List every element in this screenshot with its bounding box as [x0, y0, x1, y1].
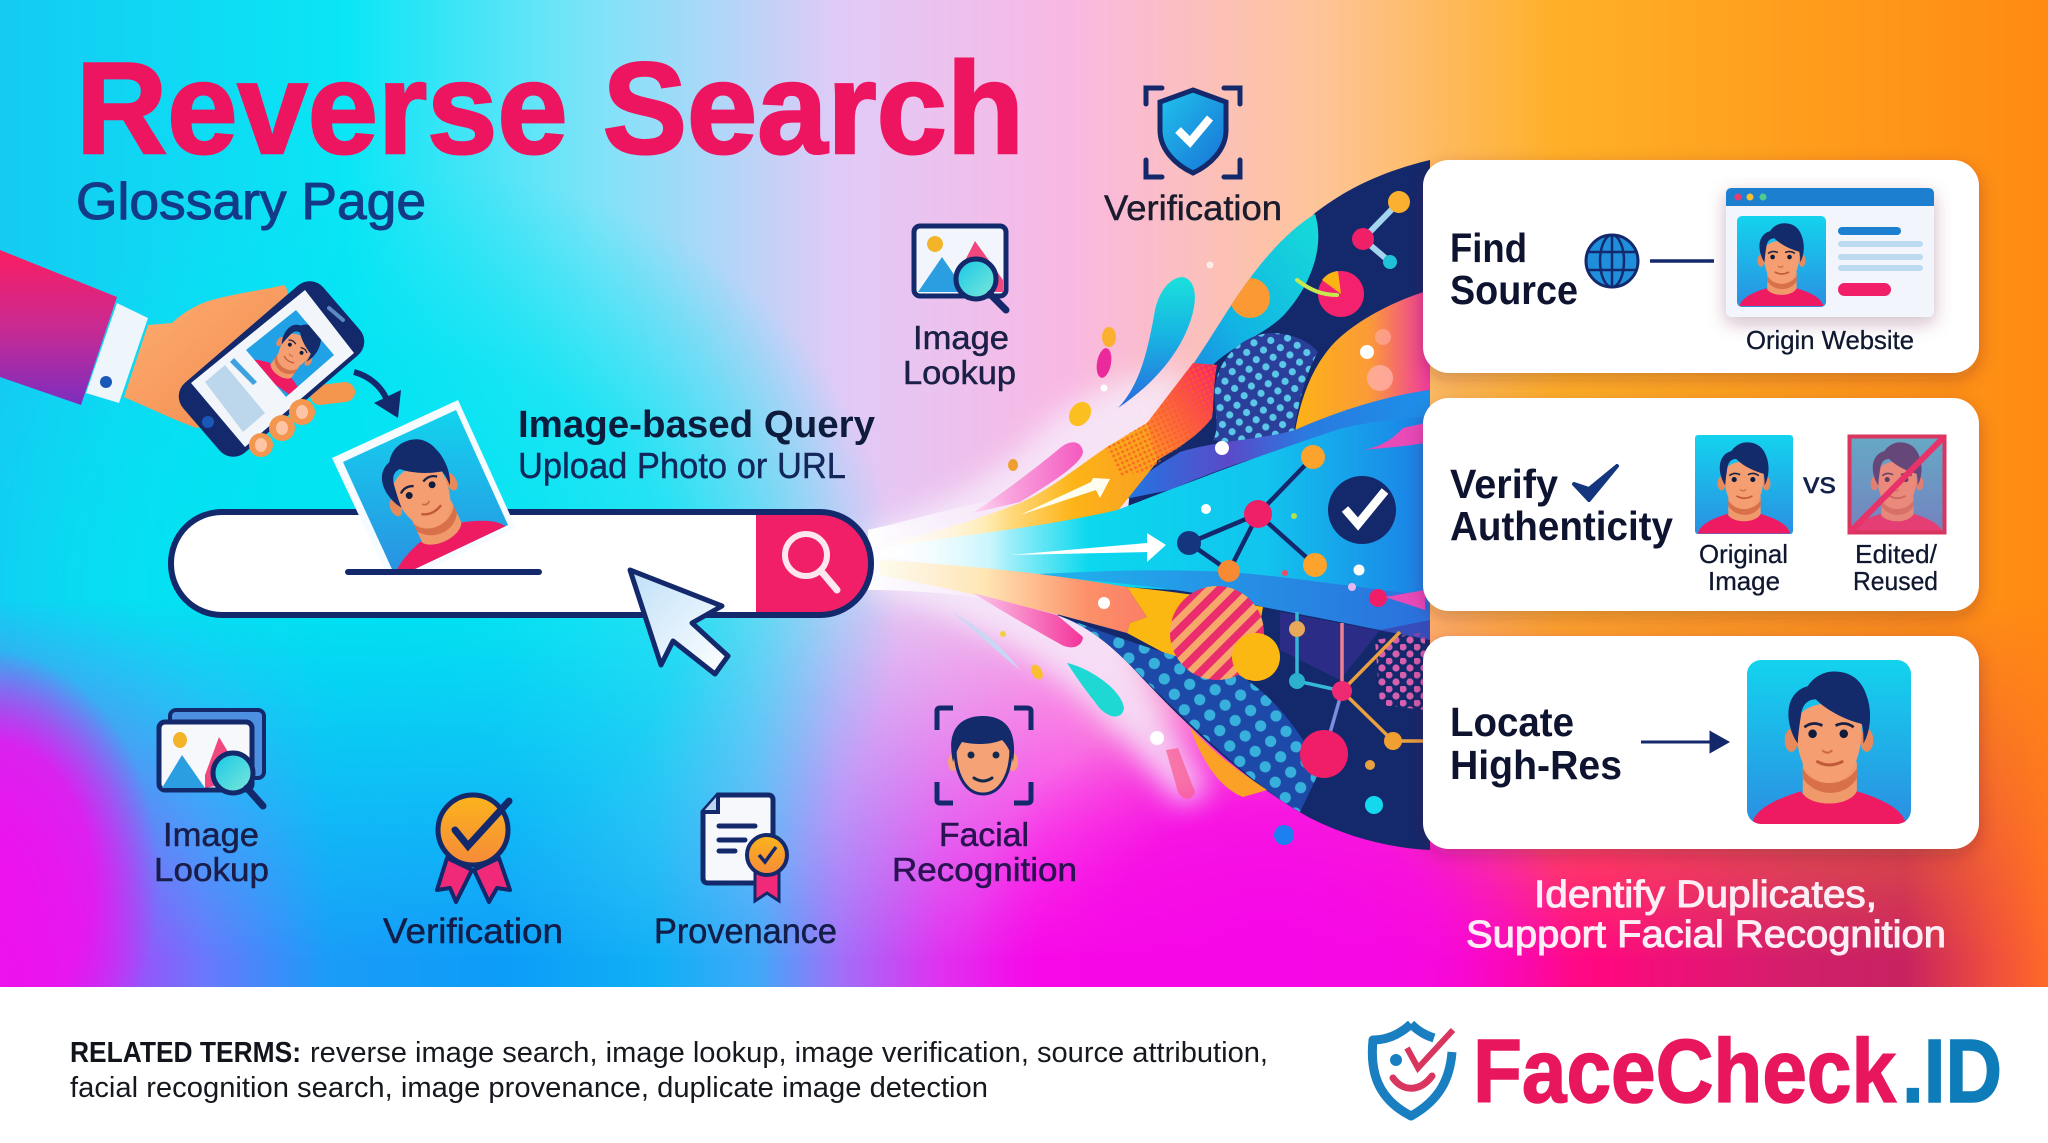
- heading: verify authenticity: Authenticity: [1450, 503, 1673, 549]
- photo card: [332, 400, 516, 586]
- labels: original and edited: [1699, 539, 1938, 596]
- browser window: [1726, 188, 1934, 317]
- pink upper blob: [973, 442, 1083, 513]
- icon: verification shield: [1146, 88, 1240, 177]
- labels: original and edited: Edited/: [1855, 539, 1938, 569]
- logo: FaceCheck: [1473, 1022, 1897, 1122]
- network two: [1177, 445, 1327, 582]
- arrow: phone to photo: [354, 372, 401, 418]
- label: facial recognition: Recognition: [892, 851, 1077, 888]
- splash artwork: [868, 160, 1430, 850]
- orange circle: [1230, 278, 1270, 318]
- teal flow: [1160, 214, 1318, 410]
- icon: facial recognition: [937, 708, 1031, 803]
- label: image lookup top: [903, 319, 1016, 391]
- network three: [1289, 612, 1425, 778]
- yellow lower flow: [1127, 587, 1263, 680]
- pink wave: [1363, 422, 1430, 450]
- related terms: facial recognition search, image provenance, duplicate image detection: [70, 1072, 988, 1104]
- heading: verify authenticity: Verify: [1450, 461, 1558, 507]
- heading: find source: Find: [1450, 225, 1527, 271]
- heading: locate high-res: High-Res: [1450, 742, 1622, 788]
- label: verification bottom: Verification: [383, 912, 563, 951]
- floating dots and drops: [953, 262, 1425, 845]
- red orange flow: [1147, 363, 1217, 462]
- search bar: [171, 512, 872, 615]
- white flare core: [868, 498, 1010, 602]
- striped circle: [1170, 586, 1264, 680]
- upload slot line: [348, 569, 539, 575]
- check badge: [1328, 476, 1396, 544]
- halftone on flow: [1105, 363, 1217, 476]
- label: provenance: Provenance: [654, 912, 837, 951]
- white arrows: [1010, 478, 1166, 562]
- fingers: [249, 433, 273, 457]
- label: origin website: Origin Website: [1746, 325, 1914, 355]
- related terms: [70, 1037, 1268, 1104]
- label: vs: vs: [1803, 467, 1836, 500]
- original image: [1695, 435, 1793, 534]
- dotted navy lower area: [1057, 615, 1320, 812]
- purple haze: [1280, 612, 1430, 680]
- cyan band: [880, 417, 1430, 610]
- hand holding phone: [0, 250, 372, 464]
- icon: globe: [1586, 235, 1638, 287]
- yellow circle: [1232, 633, 1280, 681]
- pale flare behind: [868, 370, 1210, 805]
- caption: [1466, 874, 1946, 956]
- orange sliver: [1190, 727, 1267, 797]
- label: image lookup top: Image: [913, 319, 1009, 356]
- caption: Support Facial Recognition: [1466, 914, 1946, 956]
- query label: Image-based Query: [518, 404, 875, 446]
- caption: Identify Duplicates,: [1534, 874, 1877, 916]
- label: image lookup bottom: Lookup: [154, 851, 269, 888]
- yellow flow: [893, 423, 1157, 548]
- query label: Upload Photo or URL: [518, 445, 846, 486]
- coral flow: [880, 560, 1147, 633]
- label: image lookup bottom: [154, 816, 269, 888]
- heading: find source: [1450, 225, 1578, 313]
- palm: [124, 285, 287, 428]
- pink lower blob: [973, 593, 1083, 647]
- dotted blob: [1213, 333, 1318, 442]
- logo: .ID: [1902, 1022, 2002, 1122]
- logo shield: [1372, 1024, 1453, 1116]
- icon: verification medal: [437, 795, 510, 902]
- arrow: [1641, 733, 1727, 751]
- label: facial recognition: Facial: [939, 816, 1029, 853]
- panel: locate high-res: [1423, 636, 1979, 849]
- edited image: [1848, 435, 1946, 534]
- sleeve: [0, 250, 117, 405]
- deep blue low band: [1020, 570, 1430, 640]
- icon: magnifier: [785, 534, 837, 590]
- title: Reverse Search: [76, 35, 1024, 181]
- phone: [171, 274, 372, 464]
- query label: [518, 404, 875, 486]
- network one: [1352, 191, 1410, 269]
- related terms: reverse image search, image lookup, image verification, source attribution,: [310, 1037, 1268, 1069]
- heading: verify authenticity: [1450, 461, 1673, 549]
- subtitle: Glossary Page: [76, 173, 426, 231]
- navy burst: [1057, 160, 1430, 850]
- icon: image lookup top: [914, 226, 1006, 310]
- pink dot pattern: [1375, 632, 1425, 710]
- label: verification top: Verification: [1104, 189, 1282, 228]
- labels: original and edited: Reused: [1853, 566, 1938, 596]
- cursor: [630, 570, 728, 674]
- high-res portrait: [1747, 660, 1911, 824]
- related terms: RELATED TERMS:: [70, 1037, 301, 1069]
- heading: locate high-res: [1450, 699, 1622, 788]
- panel: verify authenticity: [1423, 398, 1979, 611]
- pie chart: [1297, 271, 1364, 317]
- thumb behind: [320, 392, 345, 395]
- labels: original and edited: Image: [1708, 566, 1780, 596]
- icon: provenance document: [703, 795, 787, 901]
- label: facial recognition: [892, 816, 1077, 888]
- labels: original and edited: Original: [1699, 539, 1788, 569]
- icon: check mark: [1574, 466, 1617, 500]
- orange big flow: [1295, 290, 1430, 432]
- panel: find source: [1423, 160, 1979, 373]
- icon: stacked image lookup: [159, 710, 264, 806]
- heading: locate high-res: Locate: [1450, 699, 1574, 745]
- label: image lookup top: Lookup: [903, 354, 1016, 391]
- heading: find source: Source: [1450, 267, 1578, 313]
- blue wedge: [1120, 390, 1430, 500]
- label: image lookup bottom: Image: [163, 816, 259, 853]
- cuff: [86, 303, 148, 403]
